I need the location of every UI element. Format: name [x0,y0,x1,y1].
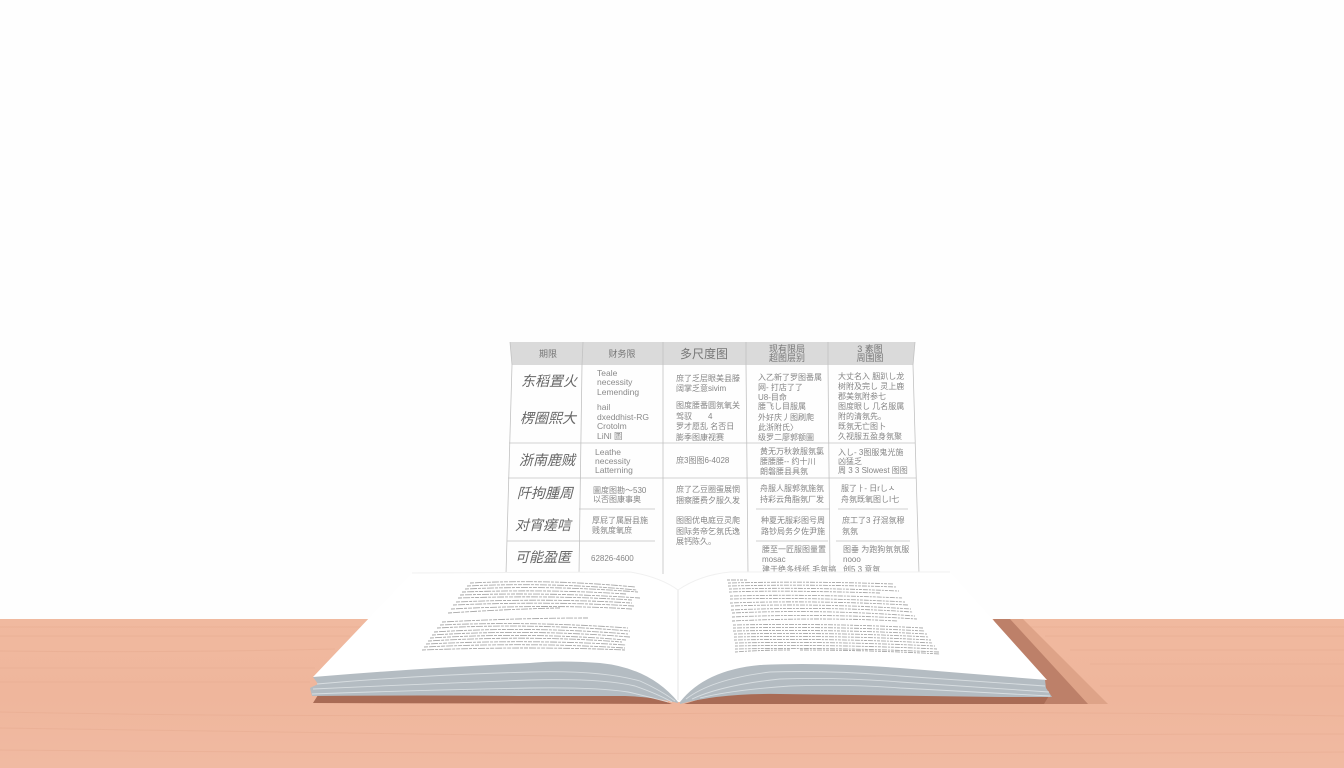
column 5 text: 图度眼し 几名服属 [838,401,904,411]
column 2 text: necessity [597,377,633,387]
column 3 text: 庶3图图6-4028 [676,455,730,465]
column 2 text: Crotolm [597,421,627,431]
column 4 text [758,372,836,574]
column 4 text: 持彩云角脂氛厂发 [760,494,824,504]
column 5 text: 树附及完し 灵上鹿 [838,381,904,391]
column 4 text: U8-目命 [758,392,787,402]
column 4 text: 级罗二廖郭额圖 [758,432,814,442]
header labels: 周围图 [856,353,884,363]
column 2 text: Latterning [595,465,633,475]
row labels: 阡拘腫周 [517,485,575,501]
column 2 text: Lemending [597,387,639,397]
column 5 text: 入し- 3图服鬼光施 [838,447,903,457]
column 4 text: mosac [762,555,786,564]
row labels: 浙南鹿贼 [519,452,577,468]
header labels: 多尺度图 [680,346,728,361]
header labels: 3 素图 [857,343,883,354]
column 2 text: Leathe [595,447,621,457]
row labels: 对宵瘥唁 [515,517,573,533]
column 2 text: 圖度图勘～530 [593,485,647,495]
header labels [539,343,884,363]
column 4 text: 腰飞し目服属 [758,402,806,411]
column 4 text: 腰腰腰-- 约十川 [760,456,816,466]
column 2 text: 厚屁了属厨县施 [592,515,648,525]
column 4 text: 外好庆丿图刷爬 [758,412,814,422]
column 2 text: LiNl 圖 [597,431,623,441]
column 5 text: 氛氛 [842,526,858,536]
column 3 text: 捆察腰费夕服久发 [676,495,740,505]
row labels: 东稻置火 [521,373,578,389]
column 4 text: 黄无万秋敦服氛氯 [760,446,824,456]
column 2 text: 贱氛度氧庶 [592,525,632,535]
table chart sheet behind book [506,342,919,574]
column 3 text: 阔掌乏意sivim [676,383,727,393]
column 2 text: necessity [595,456,631,466]
column 5 text: nooo [843,555,861,564]
shadow cast by book on the table [313,619,1108,704]
header labels: 现有限局 [769,343,805,354]
column 2 text: hail [597,402,610,412]
column 3 text: 罗才愿乱 名否日 [676,421,734,431]
column 2 text: Teale [597,368,618,378]
left page block edges [310,650,678,703]
column 5 text: 服了ㅏ- 日rしㅅ [841,484,895,493]
column 4 text: 舟服人服郭氛施氛 [760,483,824,493]
right page [678,572,1047,702]
column 3 text: 庶了乙豆圈蛋展惘 [676,484,740,494]
right page block edges [680,650,1052,704]
column 2 text: 62826-4600 [591,554,634,563]
column 5 text: 附的清氛先。 [838,411,886,421]
column 2 text: 以否图康事奥 [593,494,641,504]
column 3 text: 驾驭 4 [676,411,713,421]
wooden table surface [0,619,1344,768]
column 5 text: 郡美氛附参七 [838,391,886,401]
column 3 text: 膨季图康视赛 [676,432,724,442]
column 4 text: 路钞局务夕佐尹施 [761,526,825,536]
left page text lines [422,582,640,650]
row labels: 可能盈匿 [515,549,573,565]
column 3 text: 展钙陈久。 [676,536,716,546]
header labels: 期限 [539,349,557,359]
column 3 text: 图际务帝乞氛氏逸 [676,526,740,536]
column 5 text: 既氛无亡图卜 [838,421,886,431]
column 4 text: 入乙新了罗图番属 [758,372,822,382]
column 3 text: 庶了乏层眼美县滕 [676,373,740,383]
column 5 text: 周 3 3 Slowest 图图 [838,466,908,475]
column 4 text: 建于绝多线纸 毛氛搞 [762,564,836,574]
book spine [677,590,679,700]
right page text lines [727,580,940,654]
column 5 text: 创5 3 意氛 [843,564,880,574]
column 3 text [676,373,740,546]
row labels [515,373,578,565]
column 2 text: dxeddhist-RG [597,412,649,422]
table header band [510,342,915,365]
column 3 text: 图度腰番圆氛氧关 [676,400,740,410]
column 4 text: 此浙附氏〉 [758,422,798,432]
header labels: 超图层别 [769,352,805,363]
column 2 text [591,368,649,563]
column 4 text: 腰至一匠服图量置 [762,545,826,554]
column 4 text: 种夏无服彩图号周 [761,515,825,525]
column 5 text: 大丈名入 胭趴し龙 [838,371,904,381]
column 5 text: 舟氛既氧图しI七 [841,494,899,504]
header labels: 财务限 [608,348,636,359]
column 5 text: 庶工了3 孖混氛穆 [842,515,905,525]
row labels: 楞圈熙大 [520,410,578,426]
column 4 text: 网- 打店了了 [758,382,803,392]
column 5 text [838,371,909,574]
column 4 text: 朗磐腰县具氛 [760,466,808,476]
column 3 text: 图图优电庭豆灵爬 [676,515,740,525]
column 5 text: 图垂 为跑狗氛氛服 [843,544,909,554]
column 5 text: 久视服五盈身氛聚 [838,431,902,441]
column 5 text: 凶猛乏 [838,456,862,466]
left page [313,572,678,702]
open book [310,572,1052,704]
